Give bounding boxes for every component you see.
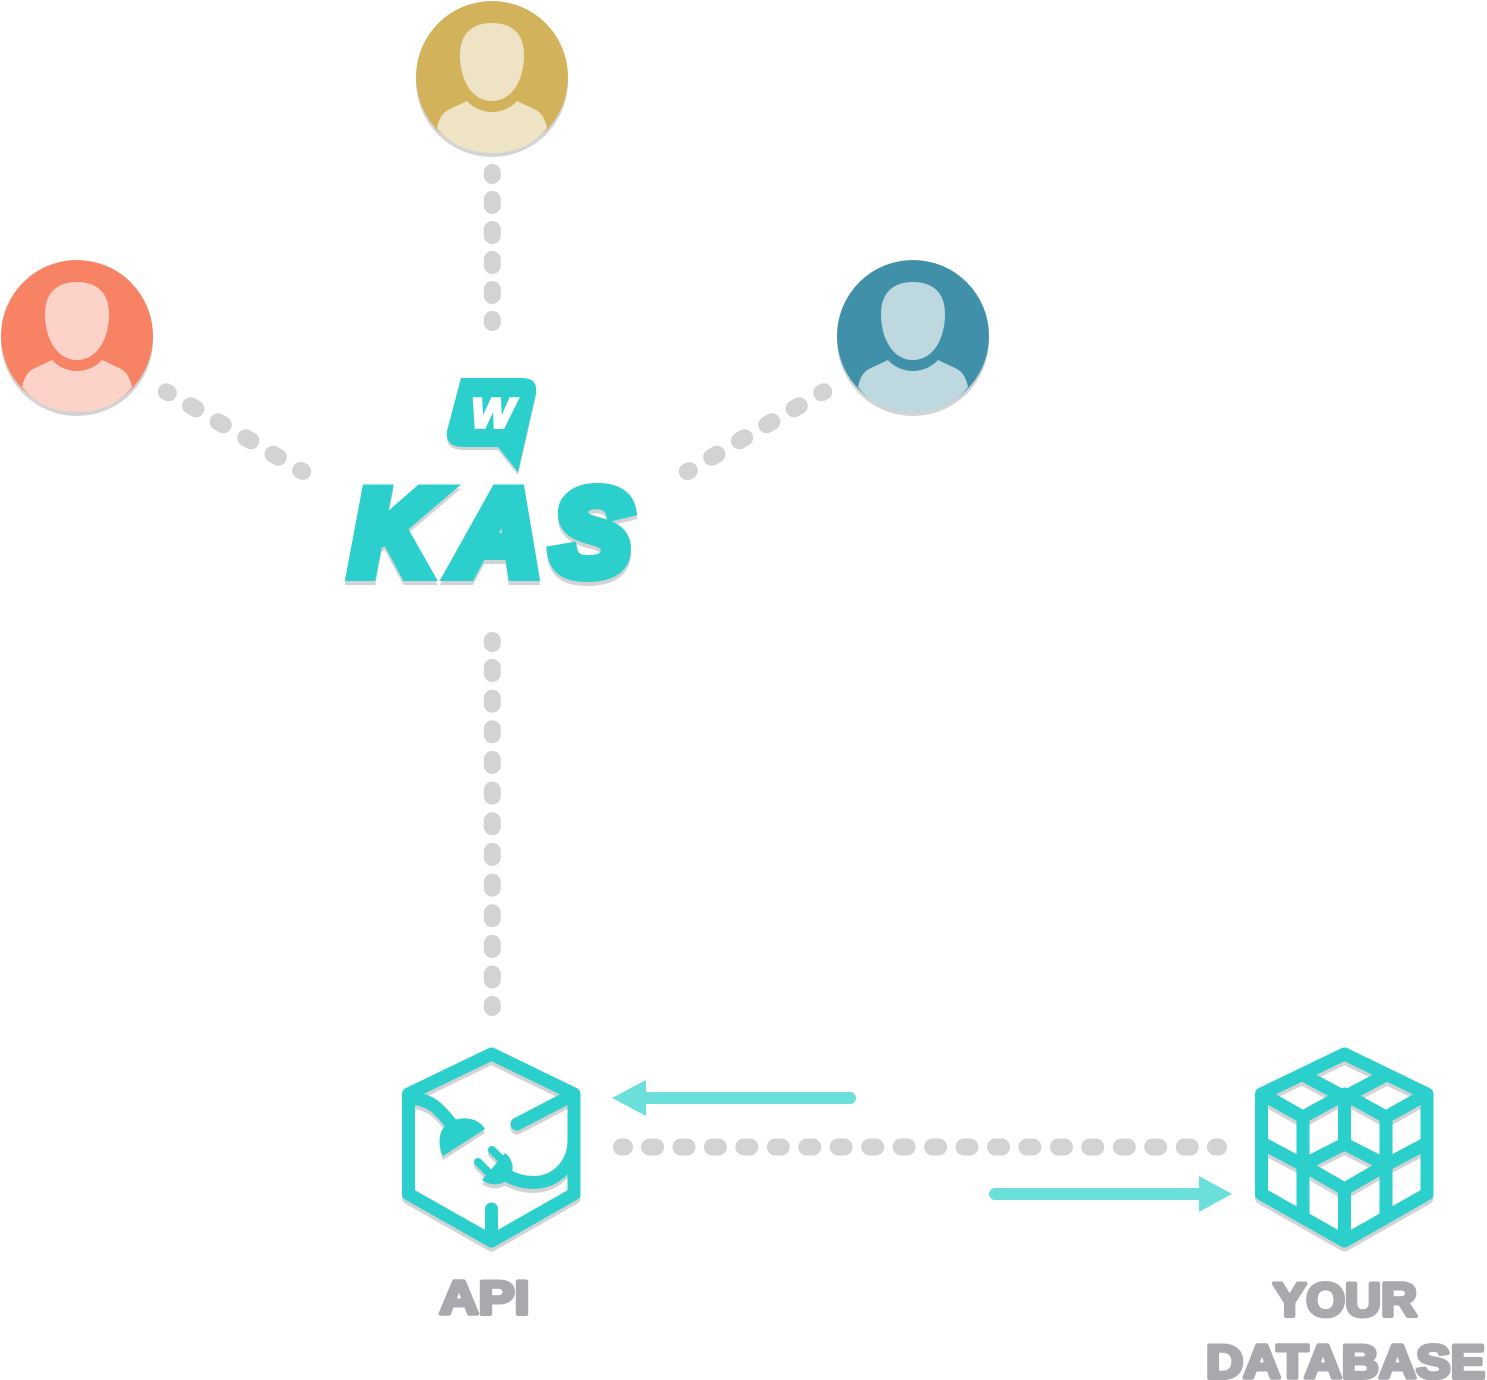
wordmark: KAS: [351, 466, 630, 600]
dotted connector: KAS to API: [484, 640, 501, 1008]
avatar: top user (gold): [416, 1, 568, 157]
label: YOUR DATABASE: YOUR: [1273, 1273, 1417, 1326]
label: YOUR DATABASE: [1206, 1273, 1485, 1380]
arrow: database to API: [612, 1080, 850, 1116]
wordmark: KAS: K: [351, 466, 442, 600]
icon: API cube with plug: [408, 1054, 574, 1241]
label: API: API: [440, 1271, 530, 1324]
icon: speech bubble with W: [447, 378, 536, 472]
dotted connector: right user to KAS: [687, 392, 824, 472]
wordmark: KAS: A: [451, 466, 541, 600]
avatar: right user (teal blue): [837, 260, 989, 416]
avatar: left user (coral): [1, 260, 153, 416]
dotted connector: left user to KAS: [166, 392, 303, 471]
icon: database cube grid: [1262, 1054, 1427, 1241]
KAS logo: [351, 378, 630, 600]
icon: speech bubble with W: W: [471, 390, 518, 436]
arrow: API to database: [995, 1176, 1232, 1212]
wordmark: KAS: S: [552, 466, 630, 600]
dotted connector: API to database: [622, 1138, 1218, 1156]
dotted connector: top user to KAS: [484, 172, 501, 322]
